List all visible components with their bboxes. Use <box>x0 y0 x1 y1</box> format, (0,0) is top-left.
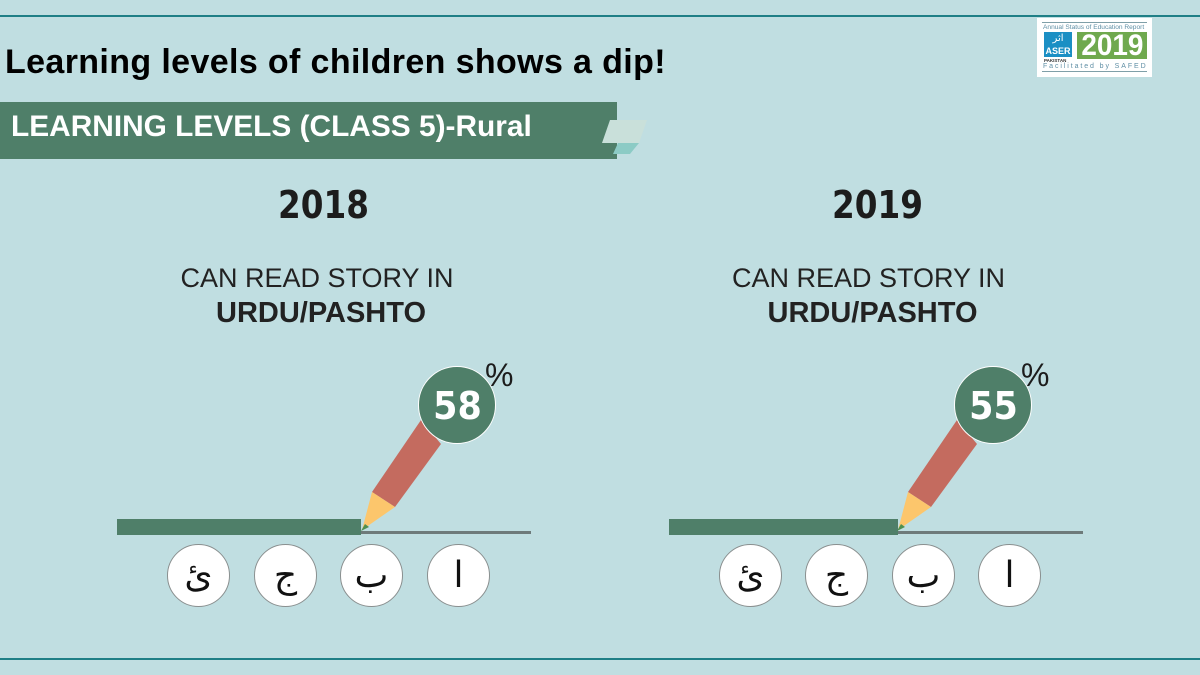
letter <box>340 544 403 607</box>
logo: ASER Pakistan 2019 <box>1037 18 1152 77</box>
letter: ب <box>907 555 940 596</box>
banner text: LEARNING LEVELS (CLASS 5)-Rural <box>11 110 532 143</box>
year heading 2018: 2018 <box>278 183 369 227</box>
logo ASER block <box>1044 32 1072 57</box>
percent circle 55 <box>954 366 1032 444</box>
logo bottom line <box>1042 71 1147 72</box>
caption: CAN READ STORY IN <box>732 263 1005 293</box>
percent sign: % <box>1021 357 1049 393</box>
caption: CAN READ STORY IN <box>180 263 454 293</box>
top rule <box>0 15 1200 17</box>
letter <box>427 544 490 607</box>
banner <box>0 102 617 159</box>
percent circle 55: 55 <box>969 384 1017 428</box>
logo ASER block: اثر <box>1052 33 1064 44</box>
panel: 2019 <box>669 183 1083 607</box>
logo ASER block: ASER <box>1045 46 1070 56</box>
letter: ب <box>355 555 388 596</box>
letter <box>892 544 955 607</box>
percent circle 58 <box>418 366 496 444</box>
letter: ج <box>274 555 297 596</box>
panel: 2018 <box>117 183 531 607</box>
letter: ا <box>453 555 464 596</box>
year heading 2019: 2019 <box>832 183 923 227</box>
letter: ئ <box>184 555 213 596</box>
caption <box>732 263 1005 329</box>
bottom rule <box>0 658 1200 660</box>
logo top line <box>1042 22 1147 23</box>
letter: ج <box>825 555 848 596</box>
letter <box>719 544 782 607</box>
letter <box>978 544 1041 607</box>
letter: ا <box>1004 555 1014 596</box>
letter <box>167 544 230 607</box>
logo facilitated text: Facilitated by SAFED <box>1043 63 1148 70</box>
progress bar and pencil <box>117 420 531 535</box>
percent sign: % <box>485 357 513 393</box>
logo Pakistan text: PAKISTAN <box>1044 58 1066 63</box>
letter <box>805 544 868 607</box>
logo header text: Annual Status of Education Report <box>1043 24 1144 31</box>
letter circles <box>719 544 1041 607</box>
percent circle 58: 58 <box>433 384 481 428</box>
letter <box>254 544 317 607</box>
caption: URDU/PASHTO <box>768 297 978 329</box>
letter: ئ <box>736 555 765 596</box>
caption: URDU/PASHTO <box>216 297 426 329</box>
banner ribbon icon <box>602 120 646 154</box>
logo 2019 block: 2019 <box>1081 29 1143 62</box>
caption <box>180 263 454 329</box>
letter circles <box>167 544 490 607</box>
progress bar and pencil <box>669 420 1083 535</box>
title: Learning levels of children shows a dip! <box>5 43 666 81</box>
